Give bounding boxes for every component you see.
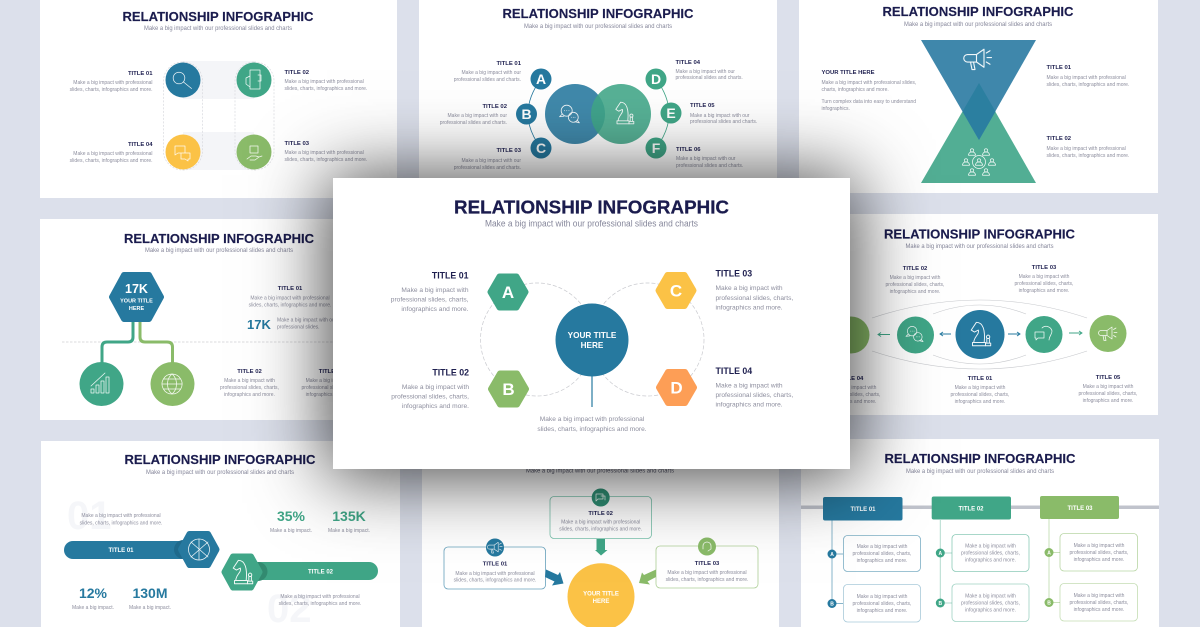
panel: slide 8, three columns [801,439,1159,627]
central circle: HERE [581,341,604,350]
panel: slide 4, hexagon tree: Make a big impact with professional [250,296,330,302]
panel: slide 5, chain of circles: Make a big impact with our professional slides and charts [906,243,1054,250]
hexagon A: A [502,283,514,302]
panel: slide 7, three cards to circle: TITLE 01 [483,562,508,568]
panel: slide 4, hexagon tree: 17K [247,317,271,332]
panel: slide 8, three columns: A [830,552,834,558]
panel: slide 1, four circles: RELATIONSHIP INFOGRAPHIC [122,9,314,24]
panel: slide 4, hexagon tree: TITLE 01 [278,286,303,292]
text: title 02 [391,368,469,410]
panel: slide 6, horizontal bars: 130M [132,585,168,601]
panel: slide 5, chain of circles: RELATIONSHIP INFOGRAPHIC [884,226,1075,242]
subheading: Make a big impact with our professional slides and charts [485,218,698,228]
text: title 03: professional slides, charts, [716,295,793,302]
panel: slide 5, chain of circles: infographics and more. [890,289,940,295]
panel: slide 6, horizontal bars: Make a big impact with our professional slides and charts [146,469,295,476]
panel: slide 7, three cards to circle: Make a big impact with our professional slides and charts [526,468,675,474]
heading: RELATIONSHIP INFOGRAPHIC [454,198,729,218]
panel: slide 2, venn with letters: RELATIONSHIP INFOGRAPHIC [502,6,694,21]
panel: slide 8, three columns: TITLE 01 [850,507,876,513]
panel: slide 3, hourglass triangles: slides, charts, infographics and more. [1046,153,1129,159]
text: title 02: infographics and more. [402,403,469,410]
panel: slide 5, chain of circles: Make a big impact with [1083,384,1134,390]
panel: slide 5, chain of circles: professional slides, charts, [822,392,880,398]
text: title 02: professional slides, charts, [391,394,469,401]
panel: slide 5, chain of circles: Make a big impact with [890,275,941,281]
panel: slide 2, venn with letters: TITLE 02 [482,104,508,110]
central circle: YOUR TITLE [568,331,617,340]
stem line [591,376,593,407]
panel: slide 2, venn with letters: professional slides and charts. [454,77,521,83]
panel: slide 4, hexagon tree: slides, charts, infographics and more. [249,302,331,308]
text: title 03: TITLE 03 [716,269,752,279]
panel: slide 3, hourglass triangles: TITLE 01 [1046,65,1072,71]
panel: slide 2, venn with letters: Make a big impact with our [462,158,521,164]
panel: slide 8, three columns: professional slides, charts, [853,551,911,557]
panel: slide 7, three cards to circle: YOUR TITLE [583,592,619,598]
panel: slide 5, chain of circles: TITLE 05 [1096,375,1121,381]
panel: slide 1, four circles: Make a big impact with professional [284,79,364,85]
panel: slide 5, chain of circles: infographics and more. [1083,398,1133,404]
dashed loops [480,283,704,396]
panel: slide 3, hourglass triangles: Turn complex data into easy to understand [822,99,916,105]
panel: slide 2, venn with letters: Make a big impact with our professional slides and charts [524,23,673,30]
panel: slide 3, hourglass triangles: RELATIONSHIP INFOGRAPHIC [882,4,1074,19]
panel: slide 1, four circles: slides, charts, infographics and more. [284,157,367,163]
panel: slide 6, horizontal bars: 35% [277,508,306,524]
panel: slide 5, chain of circles: professional slides, charts, [886,282,944,288]
panel: slide 5, chain of circles: TITLE 03 [1032,265,1057,271]
panel: slide 2, venn with letters: Make a big impact with our [676,69,735,75]
panel: slide 2, venn with letters: TITLE 06 [676,147,701,153]
panel: slide 1, four circles: Make a big impact with professional [284,150,364,156]
drop shadow of featured slide [333,178,850,469]
panel: slide 4, hexagon tree: infographics and more. [306,392,356,398]
panel: slide 1, four circles: TITLE 01 [128,71,153,77]
panel: slide 3, hourglass triangles: TITLE 02 [1046,136,1072,142]
panel: slide 2, venn with letters: professional slides and charts. [690,119,757,125]
panel: slide 8, three columns: Make a big impact with [857,594,908,600]
text: title 01: professional slides, charts, [391,297,469,304]
panel: slide 6, horizontal bars: 01 [67,494,112,538]
panel: slide 8, three columns: B [938,601,942,607]
panel: slide 7, three cards to circle: Make a big impact with professional [561,520,640,526]
panel: slide 8, three columns: RELATIONSHIP INFOGRAPHIC [884,451,1076,466]
panel: slide 4, hexagon tree: Make a big impact with [306,378,357,384]
panel: slide 4, hexagon tree: Make a big impact with our professional slides and charts [145,247,294,254]
text: title 04: TITLE 04 [716,366,752,376]
panel: slide 6, horizontal bars [41,441,400,627]
panel: slide 7, three cards to circle: Make a big impact with professional [455,571,535,577]
hexagon B: B [502,380,515,399]
panel: slide 4, hexagon tree: Make a big impact with [224,378,275,384]
text: title 02: TITLE 02 [432,368,469,378]
panel: slide 5, chain of circles: professional slides, charts, [1079,391,1137,397]
panel: slide 6, horizontal bars: RELATIONSHIP INFOGRAPHIC [124,452,316,467]
panel: slide 8, three columns: TITLE 02 [958,506,984,512]
panel: slide 1, four circles: Make a big impact with professional [73,80,152,86]
panel: slide 5, chain of circles: infographics and more. [955,399,1005,405]
panel: slide 2, venn with letters: Make a big impact with our [690,113,750,119]
panel: slide 1, four circles: slides, charts, infographics and more. [284,86,367,92]
panel: slide 6, horizontal bars: slides, charts, infographics and more. [279,601,361,607]
panel: slide 3, hourglass triangles: Make a big impact with professional [1046,75,1126,81]
panel: slide 8, three columns: infographics and more. [857,558,907,564]
panel: slide 2, venn with letters: F [652,140,661,156]
panel: slide 8, three columns: professional slides, charts, [1070,550,1128,556]
panel: slide 6, horizontal bars: TITLE 01 [108,548,134,554]
panel: slide 2, venn with letters: TITLE 01 [496,61,522,67]
panel: slide 8, three columns: professional slides, charts, [961,550,1020,556]
panel: slide 2, venn with letters [419,0,777,178]
panel: slide 8, three columns: Make a big impact with our professional slides and charts [906,468,1055,475]
text: title 03 [716,269,793,312]
panel: slide 2, venn with letters: E [666,105,676,121]
panel: slide 7, three cards to circle: TITLE 02 [588,511,614,517]
hexagon A [490,276,526,308]
text: title 03: infographics and more. [716,305,783,312]
panel: slide 7, three cards to circle: slides, charts, infographics and more. [454,578,536,584]
panel: slide 1, four circles: slides, charts, infographics and more. [70,87,152,93]
panel: slide 3, hourglass triangles: charts, infographics and more. [822,87,889,93]
panel: slide 2, venn with letters: Make a big impact with our [676,156,736,162]
panel: slide 6, horizontal bars: 12% [79,585,108,601]
panel: slide 5, chain of circles: professional slides, charts, [1015,281,1073,287]
panel: slide 3, hourglass triangles: Make a big impact with professional [1046,146,1126,152]
panel: slide 8, three columns: Make a big impact with [1074,543,1125,549]
panel: slide 8, three columns: Make a big impact with [965,544,1016,550]
panel: slide 1, four circles: Make a big impact with professional [73,151,152,157]
panel: slide 2, venn with letters: professional slides and charts. [676,163,743,169]
panel: slide 5, chain of circles: TITLE 04 [839,376,864,382]
hexagon D [659,372,694,403]
panel: slide 3, hourglass triangles: Make a big impact with professional slides, [822,80,916,86]
panel: slide 8, three columns: B [830,602,834,608]
panel: slide 1, four circles: TITLE 02 [284,70,310,76]
panel: slide 6, horizontal bars: Make a big impact. [72,605,114,611]
panel: slide 2, venn with letters: professional slides and charts. [676,75,743,81]
panel: slide 8, three columns: infographics and more. [965,558,1016,564]
panel: slide 5, chain of circles: Make a big impact with [1019,274,1070,280]
panel: slide 6, horizontal bars: Make a big impact with professional [81,513,161,519]
panel: slide 7, three cards to circle: HERE [593,599,609,605]
panel: slide 1, four circles [40,0,397,198]
text: title 02: Make a big impact with [402,384,469,391]
panel: slide 5, chain of circles: Make a big impact with [826,385,877,391]
panel: slide 8, three columns: professional slides, charts, [961,600,1020,606]
panel: slide 1, four circles: Make a big impact with our professional slides and charts [144,25,293,32]
text: title 01: TITLE 01 [432,270,469,280]
panel: slide 3, hourglass triangles: YOUR TITLE HERE [822,70,875,76]
panel: slide 7, three cards to circle: TITLE 03 [695,561,720,567]
panel: slide 8, three columns: infographics and more. [1074,557,1124,563]
panel: slide 4, hexagon tree: professional slides, charts, [220,385,279,391]
panel: slide 5, chain of circles [800,214,1158,415]
text: centre caption: slides, charts, infographics and more. [537,426,647,433]
text: title 01 [391,270,469,313]
panel: slide 7, three cards to circle: Make a big impact with professional [667,570,747,576]
panel: slide 2, venn with letters: professional slides and charts. [454,165,521,171]
text: title 01: Make a big impact with [401,287,469,294]
panel: slide 2, venn with letters: A [536,71,546,87]
panel: slide 8, three columns: TITLE 03 [1067,506,1093,512]
panel: slide 4, hexagon tree: YOUR TITLE [120,298,153,304]
panel: slide 4, hexagon tree [40,219,360,420]
text: title 04: professional slides, charts, [716,392,793,399]
panel: slide 6, horizontal bars: Make a big impact. [129,605,171,611]
panel: slide 8, three columns: A [938,551,942,557]
panel: slide 8, three columns: infographics and more. [965,608,1016,614]
panel: slide 5, chain of circles: infographics and more. [1019,288,1069,294]
panel: slide 2, venn with letters: C [536,140,546,156]
text: title 04: Make a big impact with [716,382,783,390]
text: centre caption [537,416,647,433]
text: title 03: Make a big impact with [716,285,783,292]
panel: featured slide, relationship cycle [333,178,850,469]
panel: slide 7, three cards to circle: slides, charts, infographics and more. [559,526,642,532]
panel: slide 1, four circles: TITLE 03 [284,141,310,147]
panel: slide 3, hourglass triangles: slides, charts, infographics and more. [1046,82,1129,88]
panel: slide 6, horizontal bars: TITLE 02 [308,570,334,576]
panel: slide 2, venn with letters: B [521,106,532,122]
panel: slide 8, three columns: Make a big impact with [857,544,908,550]
panel: slide 6, horizontal bars: Make a big impact. [270,528,312,534]
text: title 04 [716,366,793,409]
panel: slide 4, hexagon tree: professional slides, charts, [302,385,360,391]
panel: slide 3, hourglass triangles [799,0,1158,193]
panel: slide 4, hexagon tree: HERE [129,306,144,312]
panel: slide 5, chain of circles: TITLE 02 [903,266,928,272]
panel: slide 7, three cards to circle: slides, charts, infographics and more. [666,577,748,583]
panel: slide 6, horizontal bars: 135K [332,508,366,524]
panel: slide 4, hexagon tree: TITLE 02 [237,369,262,375]
panel: slide 2, venn with letters: D [651,71,661,87]
panel: slide 8, three columns: infographics and more. [1074,607,1124,613]
panel: slide 2, venn with letters: TITLE 03 [496,148,522,154]
panel: slide 2, venn with letters: professional slides and charts. [440,120,507,126]
panel: slide 6, horizontal bars: slides, charts, infographics and more. [80,520,162,526]
panel: slide 3, hourglass triangles: infographics. [822,106,850,112]
hexagon D: D [670,378,683,398]
hexagon C: C [670,282,682,300]
panel: slide 2, venn with letters: Make a big impact with our [448,113,507,119]
panel: slide 8, three columns: professional slides, charts, [1070,600,1128,606]
text: title 01: infographics and more. [401,306,469,313]
panel: slide 4, hexagon tree: TITLE 03 [319,369,344,375]
panel: slide 2, venn with letters: Make a big impact with our [462,70,521,76]
panel: slide 8, three columns: professional slides, charts, [853,601,911,607]
panel: slide 4, hexagon tree: professional slides. [277,324,320,330]
panel: slide 5, chain of circles: infographics and more. [826,399,876,405]
panel: slide 4, hexagon tree: 17K [125,282,148,296]
panel: slide 7, three cards to circle [422,440,779,627]
text: centre caption: Make a big impact with professional [540,416,645,423]
panel: slide 8, three columns: B [1047,600,1051,606]
panel: slide 6, horizontal bars: Make a big impact with professional [280,594,360,600]
panel: slide 2, venn with letters: TITLE 04 [676,60,701,66]
panel: slide 1, four circles: TITLE 04 [128,142,153,148]
panel: slide 5, chain of circles: TITLE 01 [968,376,993,382]
panel: slide 4, hexagon tree: RELATIONSHIP INFOGRAPHIC [124,231,314,246]
panel: slide 1, four circles: slides, charts, infographics and more. [70,158,152,164]
panel: slide 8, three columns: infographics and more. [857,608,907,614]
central circle [556,304,628,376]
panel: slide 2, venn with letters: TITLE 05 [690,103,715,109]
panel: slide 4, hexagon tree: infographics and more. [224,392,275,398]
hexagon B [491,374,526,404]
panel: slide 4, hexagon tree: Make a big impact with our [277,318,337,324]
panel: slide 6, horizontal bars: Make a big impact. [328,528,370,534]
panel: slide 5, chain of circles: professional slides, charts, [951,392,1009,398]
panel: slide 3, hourglass triangles: Make a big impact with our professional slides and charts [904,21,1053,28]
hexagon C [658,275,694,306]
panel: slide 8, three columns: A [1047,550,1051,556]
panel: slide 5, chain of circles: Make a big impact with [955,385,1006,391]
text: title 04: infographics and more. [716,402,783,409]
panel: slide 8, three columns: Make a big impact with [1074,593,1125,599]
panel: slide 8, three columns: Make a big impact with [965,594,1016,600]
